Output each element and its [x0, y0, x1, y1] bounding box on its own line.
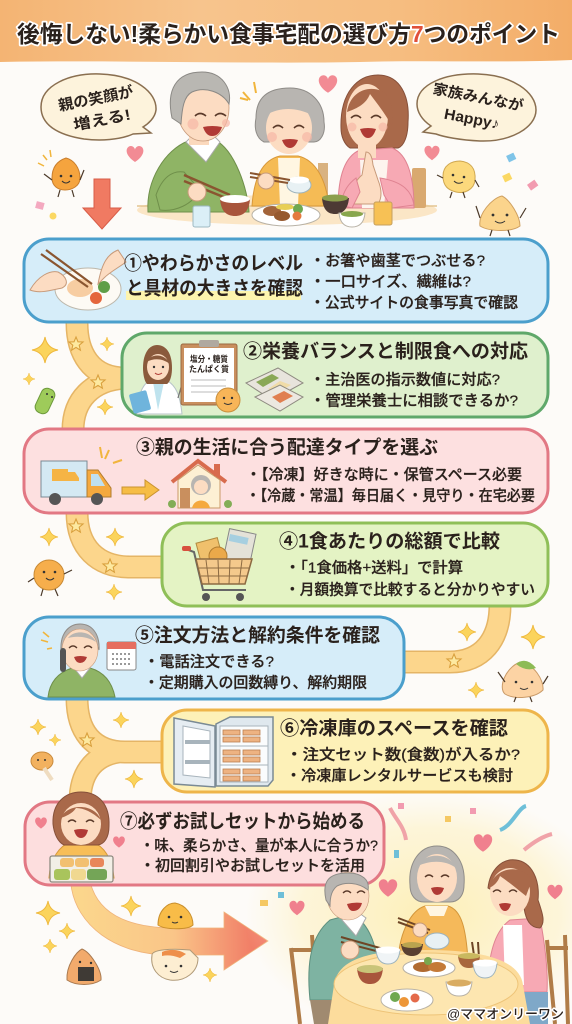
- daughter: [338, 75, 426, 208]
- character: drumstick: [31, 752, 53, 780]
- stars and sparkles: [23, 337, 545, 982]
- title text: 後悔しない!柔らかい食事宅配の選び方7つのポイント: [17, 21, 560, 47]
- bullets 4: ・「1食価格+送料」で計算: [285, 558, 463, 576]
- panel 1: softness: [24, 239, 548, 322]
- character: blob with clipboard: [216, 388, 240, 412]
- heading 1: ①やわらかさのレベル: [124, 252, 303, 274]
- bullets 6: ・冷凍庫レンタルサービスも検討: [286, 768, 513, 784]
- heading 2: ②栄養バランスと制限食への対応: [243, 340, 528, 362]
- panel 6: freezer: [162, 710, 548, 792]
- panel 4: total price: [162, 523, 548, 606]
- chairs: [291, 935, 568, 1024]
- bullets 6: ・注文セット数(食数)が入るか?: [286, 746, 520, 764]
- speech bubble left: [41, 74, 156, 140]
- arrow: truck to house: [122, 480, 159, 500]
- bullets 2: [310, 372, 518, 410]
- icon: calendar: [107, 642, 136, 670]
- icon: meal trays: [246, 368, 303, 411]
- panel 7: trial set: [25, 792, 384, 885]
- illustration: bottom family dinner wash: [245, 790, 572, 1024]
- bullets 3: ・【冷凍】好きな時に・保管スペース必要: [246, 466, 522, 484]
- speech bubble right: 家族みんなが: [431, 80, 525, 115]
- characters: bottom snacks: [67, 903, 198, 984]
- bullets 4: [285, 558, 535, 598]
- speech bubble right: [417, 74, 536, 141]
- bullets 5: [144, 654, 367, 692]
- icon: clipboard: たんぱく質: [189, 364, 229, 374]
- father: [148, 72, 249, 212]
- icon: clipboard: 塩分・糖質: [190, 354, 228, 364]
- character: rice ball with leaf: [498, 661, 548, 702]
- bullets 1: ・お箸や歯茎でつぶせる?: [310, 252, 485, 270]
- mother: [250, 88, 329, 206]
- panel 2: nutrition: [122, 333, 548, 417]
- icon: plate and chopsticks: [30, 250, 126, 310]
- bullets 7: ・初回割引やお試しセットを活用: [140, 858, 365, 874]
- icon: dietitian: [129, 345, 186, 414]
- icon: shopping cart: [182, 529, 256, 601]
- bullets 7: ・味、柔らかさ、量が本人に合うか?: [140, 836, 378, 854]
- icon: clipboard: [181, 340, 237, 405]
- character: yellow blob: [437, 161, 479, 198]
- bullets 3: ・【冷蔵・常温】毎日届く・見守り・在宅必要: [246, 488, 535, 504]
- speech bubble left: 親の笑顔が: [57, 83, 135, 115]
- panel 3: delivery type: [24, 429, 548, 513]
- round table: [328, 942, 530, 1024]
- bullets 5: ・電話注文できる?: [144, 654, 274, 670]
- bullets 3: [246, 466, 535, 504]
- winding path: [73, 323, 500, 802]
- heading 3: ③親の生活に合う配達タイプを選ぶ: [136, 436, 438, 458]
- character: bread triangle: [476, 196, 526, 236]
- bullets 7: [140, 836, 378, 874]
- bullets 6: [286, 746, 520, 784]
- older man: [309, 872, 387, 1024]
- bullets 5: ・定期購入の回数縛り、解約期限: [144, 674, 367, 692]
- highlight: [126, 291, 301, 300]
- heading 4: ④1食あたりの総額で比較: [279, 530, 500, 552]
- panel 5: ordering: [24, 617, 404, 699]
- heading 6: ⑥冷凍庫のスペースを確認: [280, 718, 508, 740]
- older woman: [398, 846, 468, 960]
- icon: open freezer: [174, 717, 273, 787]
- watermark: @ママオンリーワン: [447, 1006, 564, 1022]
- speech bubble left: 増える!: [72, 106, 132, 134]
- bullets 2: ・主治医の指示数値に対応?: [310, 372, 500, 388]
- hearts and confetti: [35, 75, 538, 220]
- bullets 2: ・管理栄養士に相談できるか?: [310, 392, 518, 410]
- bullets 1: ・一口サイズ、繊維は?: [310, 272, 471, 290]
- illustration: happy family at table: [137, 72, 437, 227]
- icon: delivery truck: [41, 447, 122, 505]
- confetti and hearts: [260, 803, 563, 915]
- heading 1: と具材の大きさを確認: [126, 278, 303, 300]
- character: round cookie: [28, 560, 72, 596]
- speech bubble right: Happy♪: [443, 106, 501, 133]
- arrow: final path to family: [71, 885, 268, 970]
- bullets 1: [310, 252, 518, 312]
- heading 1: [124, 252, 303, 300]
- illustration: bottom family dinner: [260, 803, 568, 1024]
- icon: woman holding tray: [35, 792, 125, 882]
- arrow: down: [83, 179, 121, 229]
- younger woman: [472, 860, 548, 1024]
- character: orange blob: [38, 150, 84, 197]
- icon: man on telephone: [41, 624, 115, 697]
- character: green popsicle: [33, 386, 57, 416]
- heading 7: ⑦必ずお試しセットから始める: [120, 810, 365, 832]
- icon: house with grandmother: [168, 461, 232, 508]
- title banner: [0, 0, 572, 63]
- bullets 1: ・公式サイトの食事写真で確認: [310, 294, 518, 312]
- heading 5: ⑤注文方法と解約条件を確認: [135, 624, 380, 646]
- dishes: [193, 194, 392, 227]
- bullets 4: ・月額換算で比較すると分かりやすい: [285, 580, 535, 598]
